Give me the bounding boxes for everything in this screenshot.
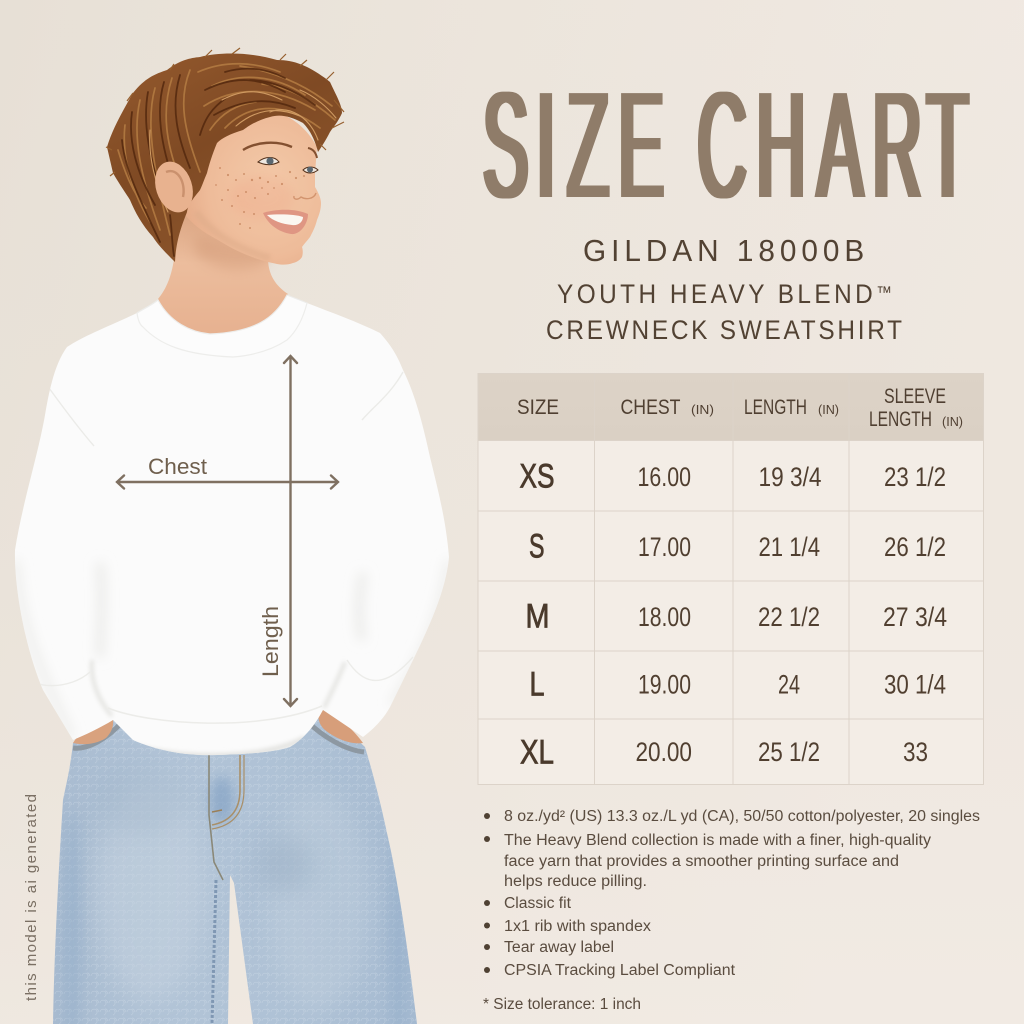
row M values: 22 1/2 [758,602,820,632]
sweatshirt [15,294,449,756]
arrow: length [284,356,297,706]
feature list: CPSIA Tracking Label Compliant [504,962,736,979]
table header: SLEEVE [884,384,946,408]
hair [107,54,342,262]
table header: CHEST [620,395,680,419]
subtitle: brand and model: GILDAN 18000B [583,233,864,268]
freckles [215,167,305,229]
row XL values: 20.00 [636,737,692,767]
row M values: 27 3/4 [883,602,947,632]
model photo illustration [0,48,460,1024]
subtitle: brand and model: CREWNECK SWEATSHIRT [546,316,902,345]
subtitle: brand and model: ™ [876,283,892,302]
size labels: XL [520,734,554,772]
row L values: 19.00 [638,670,691,700]
table header [478,373,984,440]
table header: SIZE [517,395,559,419]
length label: Length [258,606,283,677]
subtitle: brand and model [546,233,902,345]
row L values: 30 1/4 [884,670,946,700]
row S values: 26 1/2 [884,532,946,562]
row XS values: 19 3/4 [758,462,822,492]
measurement arrows [117,356,338,706]
row L values: 24 [778,670,800,700]
eyes and brows [243,143,318,173]
row XS values: 23 1/2 [884,462,946,492]
neck [158,200,288,340]
row S values [638,532,946,562]
row XS values: 16.00 [638,462,691,492]
hair strands [118,64,336,256]
chest label: Chest [148,454,207,479]
jeans [50,700,420,1024]
feature list: 8 oz./yd² (US) 13.3 oz./L yd (CA), 50/50 cotton/polyester, 20 singles [504,808,980,825]
loose hair tips [106,48,344,176]
row XL values [636,737,928,767]
row XL values: 33 [903,737,928,767]
size labels: S [529,528,544,566]
feature list: The Heavy Blend collection is made with a finer, high-quality [504,832,931,849]
size labels [520,458,554,772]
smile [263,210,308,234]
feature list: face yarn that provides a smoother printing surface and [504,853,899,870]
row S values: 21 1/4 [758,532,820,562]
row L values [638,670,946,700]
table header: (IN) [942,414,963,429]
face [185,109,321,265]
size labels: M [526,598,550,636]
subtitle: brand and model: YOUTH HEAVY BLEND [557,280,873,309]
table header: LENGTH [744,395,807,419]
row XL values: 25 1/2 [758,737,820,767]
size labels: L [530,666,544,704]
size table [478,373,984,784]
row M values: 18.00 [638,602,691,632]
feature list: helps reduce pilling. [504,873,647,890]
row M values [638,602,947,632]
table body cells [478,373,984,784]
table header: (IN) [818,402,839,417]
size tolerance note: * Size tolerance: 1 inch [483,996,641,1013]
hands in pockets [73,708,363,744]
feature list: Tear away label [504,939,614,956]
nose [294,193,316,199]
collar [137,295,307,357]
arrow: chest [117,476,338,488]
ai note: this model is ai generated [23,794,40,1001]
ear [149,157,199,217]
table header: LENGTH [869,407,932,431]
row S values: 17.00 [638,532,691,562]
table header: (IN) [691,402,714,417]
row XS values [638,462,946,492]
title: SIZE CHART [483,60,968,229]
size labels: XS [520,458,554,496]
feature list: Classic fit [504,895,572,912]
feature list: 1x1 rib with spandex [504,918,651,935]
feature list [484,808,980,979]
